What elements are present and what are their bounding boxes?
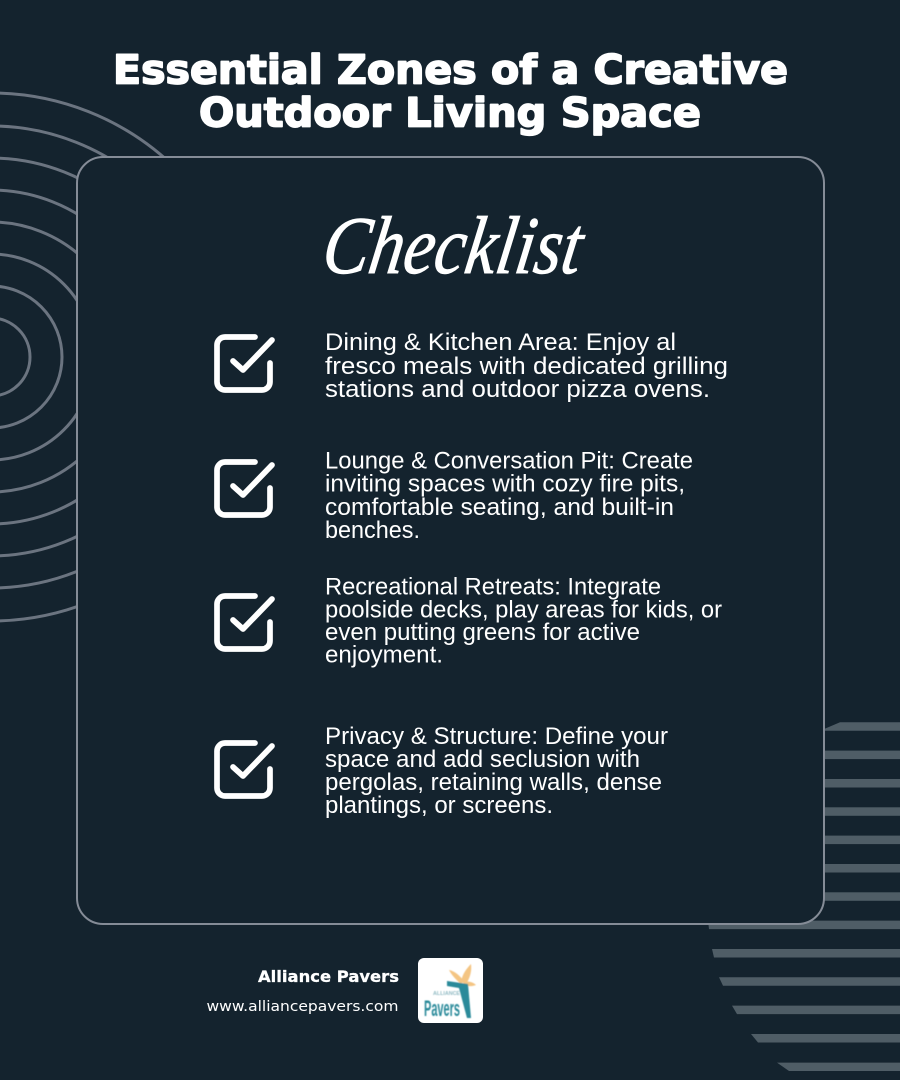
footer: company name and website: www.alliancepavers.com xyxy=(206,999,398,1015)
icon: checkbox 1 xyxy=(217,337,272,390)
logo: alliance pavers: Pavers xyxy=(424,996,460,1021)
text: privacy and structure xyxy=(325,723,668,819)
text: recreational retreats: Recreational Retreats: Integrate xyxy=(325,574,661,600)
logo: alliance pavers: ALLIANCE xyxy=(433,991,461,997)
title: Outdoor Living Space xyxy=(199,90,701,136)
text: lounge and conversation: comfortable seating, and built-in xyxy=(325,494,674,521)
text: dining and kitchen xyxy=(325,329,728,403)
text: recreational retreats: enjoyment. xyxy=(325,642,443,668)
text: privacy and structure: pergolas, retaining walls, dense xyxy=(325,769,662,796)
panel: checklist card xyxy=(77,157,824,924)
icon: checkbox 4 xyxy=(217,743,272,796)
text: lounge and conversation: inviting spaces with cozy fire pits, xyxy=(325,470,685,498)
text: lounge and conversation xyxy=(325,448,693,544)
text: privacy and structure: space and add seclusion with xyxy=(325,746,640,773)
heading: checklist: Checklist xyxy=(317,199,591,291)
icon: checkbox 3 xyxy=(217,596,272,649)
checklist item 1 xyxy=(217,329,728,403)
text: recreational retreats: poolside decks, play areas for kids, or xyxy=(325,596,722,624)
text: lounge and conversation: benches. xyxy=(325,517,420,544)
text: dining and kitchen: fresco meals with dedicated grilling xyxy=(325,353,728,380)
logo: alliance pavers xyxy=(418,958,483,1023)
text: dining and kitchen: Dining & Kitchen Area: Enjoy al xyxy=(325,329,676,356)
footer: company name and website xyxy=(206,967,399,1015)
icon: checkbox 2 xyxy=(217,462,272,515)
text: recreational retreats: even putting greens for active xyxy=(325,619,640,646)
checklist item 2 xyxy=(217,448,693,544)
checklist item 4 xyxy=(217,723,668,819)
checklist item 3 xyxy=(217,574,722,668)
title: Essential Zones of a Creative xyxy=(113,48,788,94)
title xyxy=(113,48,788,136)
text: lounge and conversation: Lounge & Conversation Pit: Create xyxy=(325,448,693,474)
text: privacy and structure: plantings, or screens. xyxy=(325,792,553,819)
text: privacy and structure: Privacy & Structure: Define your xyxy=(325,723,668,750)
text: recreational retreats xyxy=(325,574,722,668)
footer: company name and website: Alliance Pavers xyxy=(258,967,399,986)
text: dining and kitchen: stations and outdoor pizza ovens. xyxy=(325,376,710,403)
